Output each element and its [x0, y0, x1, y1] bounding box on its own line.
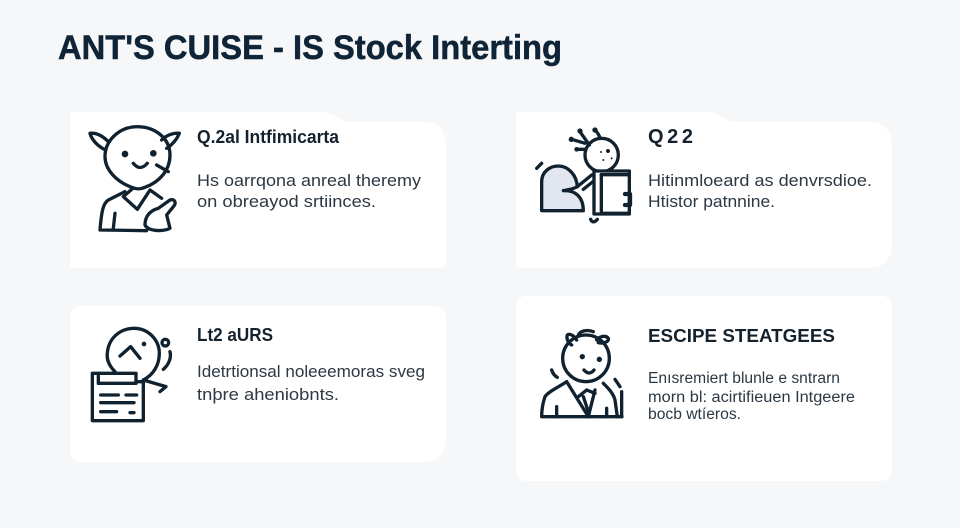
body text — [197, 171, 422, 211]
heading: ESCIPE STEATGEES — [648, 326, 835, 346]
body text: morn bl: acirtifieuen Intgeere — [648, 389, 855, 406]
icon: person in suit — [542, 331, 622, 417]
body text: on obreayod srtiinces. — [197, 192, 376, 211]
heading: Q22 — [648, 126, 693, 148]
panel: top left — [70, 112, 446, 268]
panel: bottom right — [516, 296, 892, 481]
icon: ant with book — [537, 127, 630, 222]
body text: Htistor patnnine. — [648, 192, 775, 211]
body text: Hs oarrqona anreal theremy — [197, 171, 422, 190]
body text — [197, 362, 425, 404]
body text — [648, 171, 872, 211]
panel: bottom left — [70, 306, 446, 462]
body text — [648, 370, 855, 423]
body text: Enısremiert blunle e sntrarn — [648, 370, 840, 387]
icon: document with bubble — [92, 328, 170, 421]
body text: Idetrtionsal noleeemoras sveg — [197, 362, 425, 381]
heading: Q.2al Intfimicarta — [197, 127, 340, 147]
body text: Hitinmloeard as denvrsdioe. — [648, 171, 872, 190]
heading: Lt2 aURS — [197, 325, 273, 345]
body text: bocb wtíeros. — [648, 406, 741, 423]
title: ANT'S CUISE - IS Stock Interting — [58, 29, 562, 67]
panel: top right — [516, 112, 892, 268]
icon: character with ears — [90, 127, 179, 231]
body text: tnþre aheniobnts. — [197, 385, 339, 404]
